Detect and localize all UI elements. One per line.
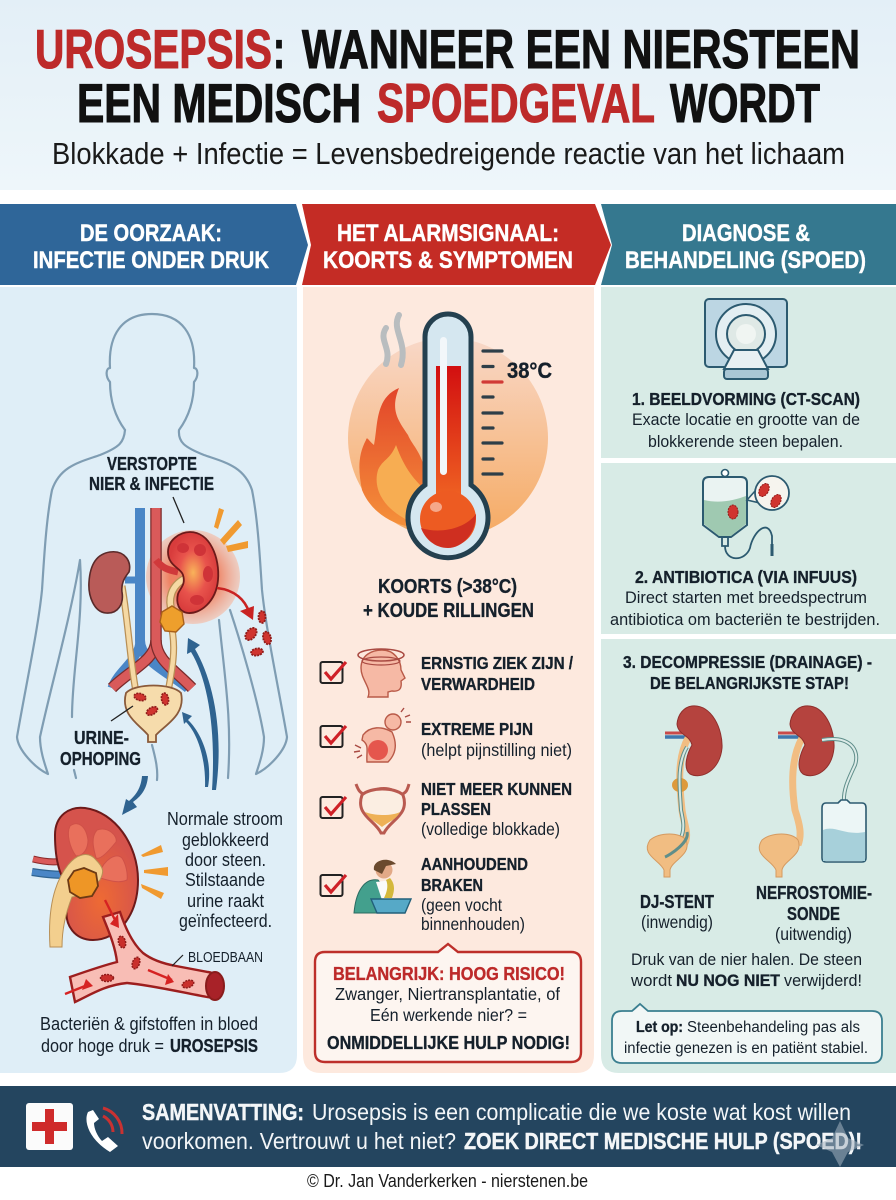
vessel opening (206, 972, 224, 1000)
pelvis and ureter (50, 855, 103, 947)
vessel bacteria (100, 935, 195, 989)
ureters (122, 578, 186, 692)
kidney diagram upper (89, 508, 272, 742)
text: Druk van de nier halen. De steen (631, 950, 862, 969)
panel: diagnosis step 2 background (601, 463, 896, 634)
kidney body (55, 808, 138, 940)
title: UROSEPSIS (35, 18, 272, 80)
symptom: unable to urinate: (volledige blokkade) (421, 819, 560, 839)
kidney stone (160, 606, 184, 632)
text: blocked flow: Normale stroom (167, 809, 283, 829)
symptom: unable to urinate (320, 779, 572, 839)
column header: cause: DE OORZAAK: (80, 220, 222, 247)
text: blocked flow: door steen. (185, 850, 266, 870)
text: urosepsis definition: door hoge druk = (41, 1035, 164, 1056)
pain rays (141, 845, 168, 899)
column header: cause (0, 204, 308, 285)
callout: high risk: Zwanger, Niertransplantatie, of (335, 984, 560, 1004)
thermometer with flame (348, 314, 552, 558)
column header: alarm: KOORTS & SYMPTOMEN (323, 247, 573, 274)
text: ERNSTIG ZIEK ZIJN / (421, 653, 573, 673)
callout: high risk: ONMIDDELLIJKE HULP NODIG! (327, 1033, 570, 1053)
blood vessels (112, 508, 192, 688)
label: nephrostomy (756, 883, 872, 944)
column header: alarm (302, 204, 611, 285)
text (630, 950, 862, 990)
symptom: severe illness (320, 649, 573, 697)
step 1: CT scan: blokkerende steen bepalen. (648, 432, 843, 451)
text: blocked flow: geïnfecteerd. (179, 911, 272, 931)
text: verwijderd! (784, 971, 862, 990)
copyright: © Dr. Jan Vanderkerken - nierstenen.be (307, 1171, 588, 1191)
note box: infectie genezen is en patiënt stabiel. (624, 1040, 868, 1057)
checkbox (320, 797, 346, 818)
step 1: CT scan (632, 299, 860, 451)
icon: abdominal pain (354, 708, 411, 762)
text: AANHOUDEND (421, 854, 528, 874)
renal vessels (33, 858, 78, 862)
icon: red cross (26, 1103, 73, 1150)
text: urosepsis definition (40, 1013, 258, 1056)
symptom: unable to urinate: PLASSEN (421, 799, 491, 819)
panel: cause background (0, 287, 297, 1073)
thermometer body (408, 314, 488, 558)
label: blocked kidney: NIER & INFECTIE (89, 474, 214, 494)
symptom: extreme pain: (helpt pijnstilling niet) (421, 740, 572, 760)
text: wordt (630, 971, 672, 990)
label: nephrostomy: NEFROSTOMIE- (756, 883, 872, 903)
text: blocked flow: geblokkeerd (182, 830, 269, 850)
diagram: nephrostomy tube (759, 706, 866, 877)
callout: high risk: Eén werkende nier? = (370, 1005, 527, 1025)
label: nephrostomy: SONDE (787, 904, 840, 924)
label: nephrostomy: (uitwendig) (775, 924, 852, 944)
step 2: antibiotics: Direct starten met breedspectrum (625, 588, 867, 607)
heading: 3. DECOMPRESSIE (DRAINAGE) - (623, 652, 872, 672)
stone (68, 868, 98, 898)
step 2: antibiotics: antibiotica om bacteriën te bestrijden. (610, 610, 880, 629)
text: blocked flow (167, 809, 283, 931)
fever text: KOORTS (>38°C) (378, 575, 517, 598)
label: urine retention: URINE- (74, 728, 129, 748)
diagram: DJ stent (647, 706, 722, 877)
text: urosepsis definition: Bacteriën & gifstoffen in bloed (40, 1013, 258, 1034)
fever text: + KOUDE RILLINGEN (363, 599, 534, 622)
left kidney (89, 552, 130, 613)
title (35, 18, 860, 134)
checkbox (320, 726, 346, 747)
title: EEN MEDISCH (77, 72, 361, 134)
label: urine retention (60, 706, 141, 769)
step 3: decompression (612, 652, 882, 1063)
highlight (440, 337, 447, 475)
text: urosepsis definition: UROSEPSIS (170, 1035, 258, 1056)
icon: dizzy head (358, 649, 405, 697)
callout: high risk: BELANGRIJK: HOOG RISICO! (333, 964, 565, 984)
symptom: vomiting: BRAKEN (421, 875, 483, 895)
steam (383, 315, 403, 365)
column header: cause: INFECTIE ONDER DRUK (33, 247, 270, 274)
header background (0, 0, 896, 190)
column header: diagnosis: DIAGNOSE & (682, 220, 810, 247)
temperature label: 38°C (507, 358, 552, 383)
label: blocked kidney (89, 454, 214, 523)
column header: diagnosis (601, 204, 896, 285)
symptom: extreme pain (320, 708, 572, 762)
vessel arrows (65, 900, 172, 994)
summary text (142, 1099, 862, 1154)
label: blocked kidney: VERSTOPTE (107, 454, 197, 474)
label: DJ stent (640, 892, 714, 932)
label: bloodstream: BLOEDBAAN (188, 950, 263, 966)
label: DJ stent: (inwendig) (641, 912, 713, 932)
summary bar (0, 1086, 896, 1167)
icon: person vomiting (354, 860, 411, 913)
panel: diagnosis step 3 background (601, 639, 896, 1073)
note box: Let op: (636, 1019, 683, 1036)
enlarged kidney (32, 808, 224, 1002)
summary text: Urosepsis is een complicatie die we koste wat kost willen (312, 1099, 851, 1125)
pain rays (214, 508, 248, 552)
column header: alarm: HET ALARMSIGNAAL: (337, 220, 559, 247)
title: SPOEDGEVAL (377, 72, 655, 134)
callout: high risk (315, 944, 581, 1062)
bloodstream vessel (70, 912, 220, 1002)
step 2: antibiotics (610, 470, 880, 629)
liquid (436, 366, 461, 495)
red arrow to bacteria (217, 588, 249, 612)
summary text: SAMENVATTING: (142, 1099, 304, 1125)
heading (623, 652, 872, 693)
sun circle (348, 338, 548, 538)
step 1: CT scan: Exacte locatie en grootte van de (632, 410, 860, 429)
icon: phone (86, 1108, 122, 1152)
text: NIET MEER KUNNEN (421, 779, 572, 799)
checkbox (320, 662, 346, 683)
panel: symptoms background (303, 287, 594, 1073)
panel: diagnosis step 1 background (601, 287, 896, 458)
symptom: vomiting: (geen vocht (421, 895, 502, 915)
symptom: vomiting: binnenhouden) (421, 914, 525, 934)
bladder (125, 686, 182, 742)
summary text: voorkomen. Vertrouwt u het niet? (142, 1128, 456, 1154)
note box: Steenbehandeling pas als (687, 1019, 860, 1036)
flame (359, 388, 425, 527)
calyces (68, 824, 127, 882)
title: WORDT (670, 72, 820, 134)
scale ticks (483, 351, 502, 474)
checkbox (320, 875, 346, 896)
note box (612, 1004, 882, 1063)
label: DJ stent: DJ-STENT (640, 892, 714, 912)
title: : (273, 18, 285, 80)
text: 2. ANTIBIOTICA (VIA INFUUS) (635, 567, 857, 587)
watermark sparkle (816, 1121, 864, 1167)
symptom: severe illness: VERWARDHEID (421, 674, 535, 694)
text: 1. BEELDVORMING (CT-SCAN) (632, 389, 860, 409)
label: urine retention: OPHOPING (60, 749, 141, 769)
right infected kidney (168, 532, 218, 613)
body silhouette (17, 314, 287, 780)
icon: bladder (356, 784, 409, 833)
fever text (363, 575, 534, 622)
text: NU NOG NIET (676, 971, 781, 990)
infection glow (146, 530, 240, 624)
icon: CT scanner (705, 299, 787, 379)
text: EXTREME PIJN (421, 719, 533, 739)
icon: IV bag (703, 470, 789, 558)
heading: DE BELANGRIJKSTE STAP! (650, 673, 849, 693)
blue flow arrows (122, 638, 219, 815)
text: blocked flow: Stilstaande (185, 870, 265, 890)
text: blocked flow: urine raakt (187, 891, 264, 911)
escaped bacteria (243, 611, 272, 656)
symptom: vomiting (320, 854, 528, 934)
bladder bacteria (133, 692, 169, 717)
